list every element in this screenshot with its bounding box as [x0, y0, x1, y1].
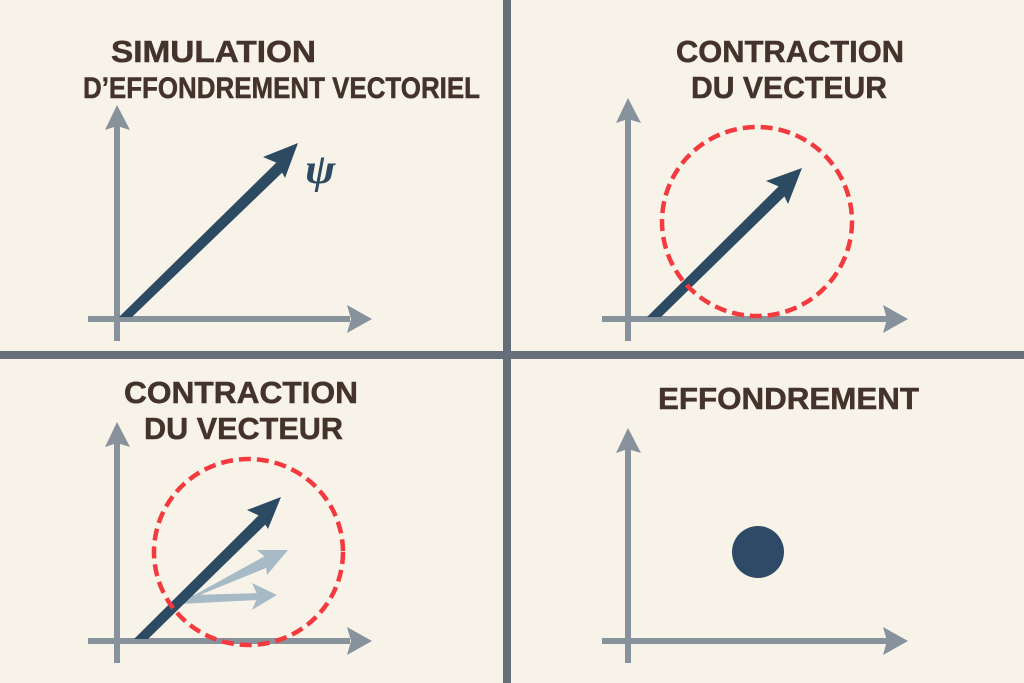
heading: contraction: [676, 34, 904, 105]
heading: contraction: DU VECTEUR: [144, 411, 343, 446]
axes: [88, 422, 372, 663]
arrow: state vector: [134, 497, 281, 639]
horizontal divider: [0, 351, 1024, 359]
panel: simulation: [83, 34, 480, 341]
label: psi: ψ: [305, 147, 336, 193]
heading: simulation: SIMULATION: [111, 34, 316, 69]
vertical divider: [503, 0, 511, 683]
heading: contraction: CONTRACTION: [676, 34, 904, 69]
axes: [88, 105, 372, 341]
heading: effondrement: EFFONDREMENT: [658, 381, 919, 416]
heading: contraction: CONTRACTION: [124, 375, 358, 410]
arrows: faded vectors: [180, 550, 288, 610]
heading: contraction: [124, 375, 358, 446]
panel: effondrement: [602, 381, 919, 663]
dashed circle: [154, 459, 343, 645]
collapsed point: [732, 526, 784, 578]
arrow: state vector: [647, 168, 802, 317]
heading: contraction: DU VECTEUR: [691, 70, 887, 105]
heading: simulation: D’EFFONDREMENT VECTORIEL: [83, 72, 480, 105]
panel: contraction 2: [88, 375, 372, 663]
heading: simulation: [83, 34, 480, 105]
arrow: state vector: [119, 143, 298, 317]
panel: contraction 1: [602, 34, 908, 341]
dashed circle: [662, 127, 852, 316]
axes: [602, 428, 908, 663]
axes: [602, 98, 908, 341]
